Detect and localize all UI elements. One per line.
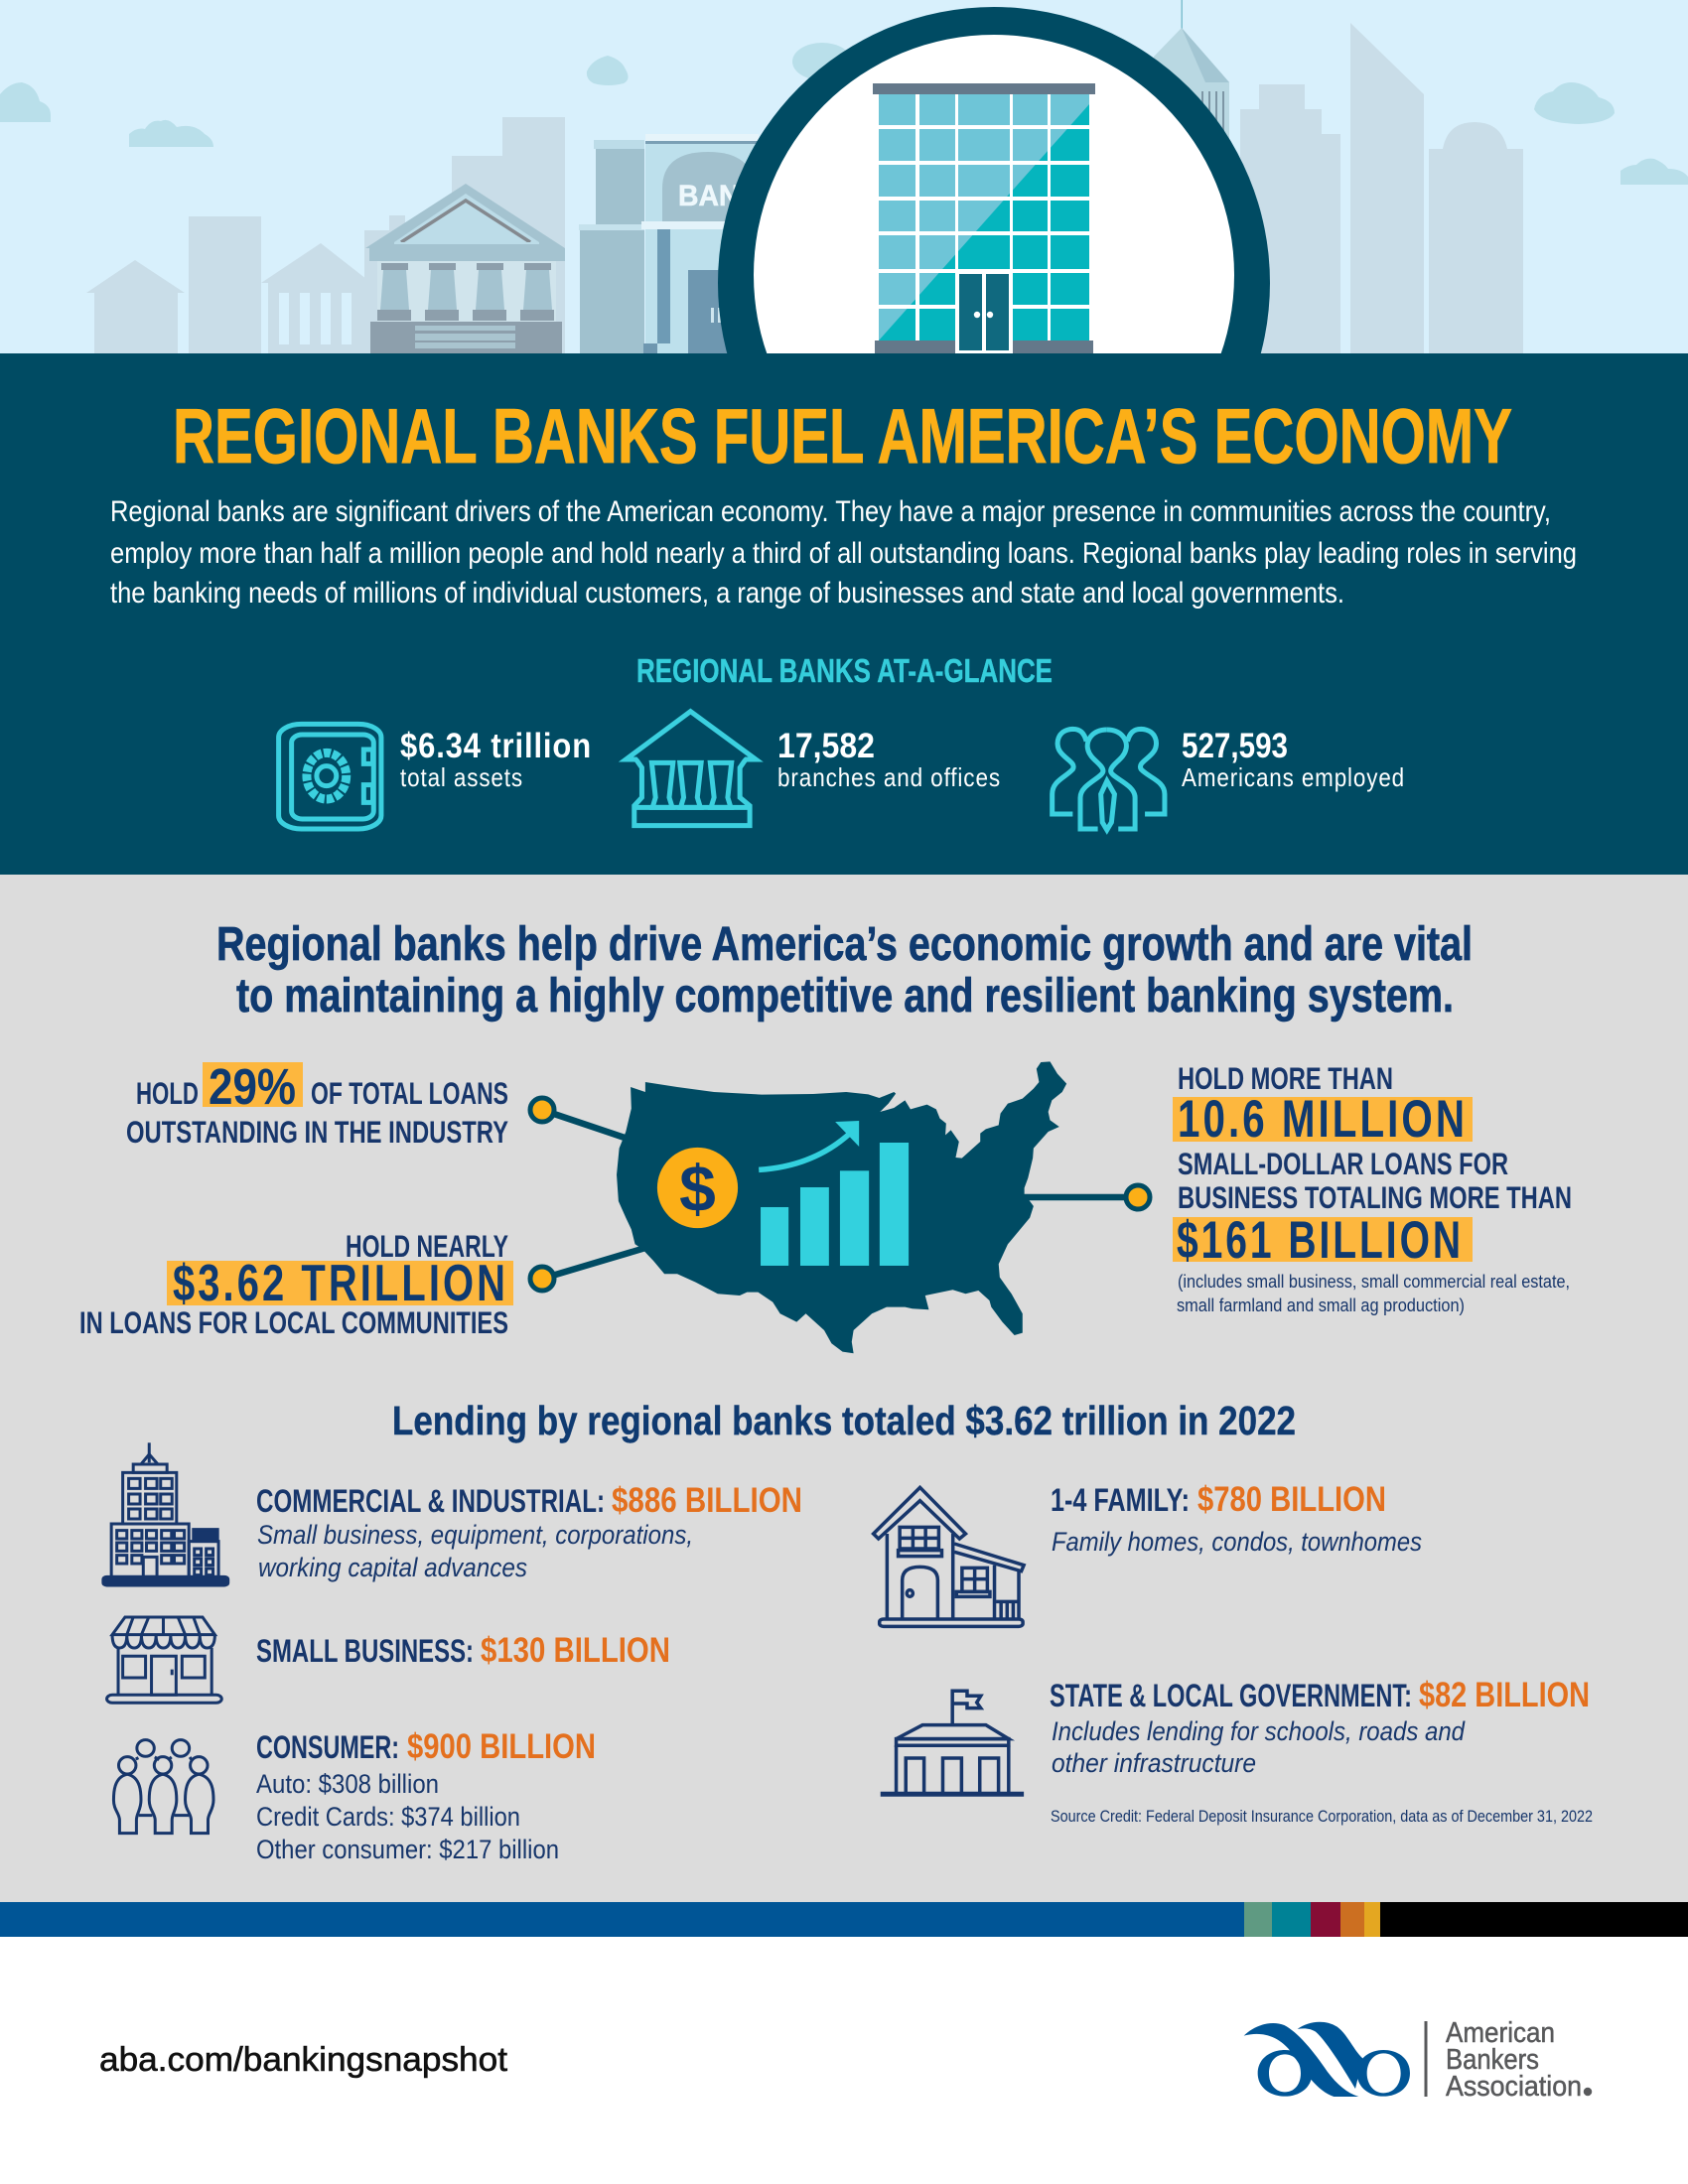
callout: $3.62 trillion: IN LOANS FOR LOCAL COMMUNITIES bbox=[79, 1304, 508, 1340]
logo wordmark: Bankers bbox=[1446, 2044, 1539, 2076]
icon: spire tower bbox=[1154, 0, 1229, 159]
panel: grey content area bbox=[0, 875, 1688, 1902]
text: state and local government: Includes lending for schools, roads and bbox=[1052, 1716, 1466, 1746]
callout: $3.62 trillion bbox=[79, 1228, 513, 1340]
text: small business: $130 BILLION bbox=[481, 1631, 670, 1670]
icon: circular frame bbox=[718, 7, 1270, 559]
BAN sign text: BANK bbox=[678, 180, 760, 212]
intro paragraph: the banking needs of millions of individual customers, a range of businesses and state and local governments. bbox=[110, 577, 1344, 610]
text: 1-4 family bbox=[1051, 1480, 1422, 1557]
icon: glass office building bbox=[873, 83, 1095, 353]
text: state and local government bbox=[1050, 1676, 1590, 1778]
logo wordmark: Association bbox=[1446, 2071, 1582, 2103]
text: state and local government: STATE & LOCAL GOVERNMENT: bbox=[1050, 1678, 1412, 1713]
text: commercial and industrial: Small business, equipment, corporations, bbox=[257, 1520, 693, 1550]
icon: consumers bbox=[113, 1740, 213, 1834]
logo wordmark: American bbox=[1446, 2017, 1555, 2049]
icon: employees bbox=[1053, 729, 1165, 830]
text: commercial and industrial: working capital advances bbox=[258, 1553, 527, 1582]
intro paragraph bbox=[110, 495, 1577, 610]
callout: small-dollar loans bbox=[1173, 1060, 1572, 1270]
connector: small-dollar loans bbox=[1023, 1185, 1150, 1209]
bar chart: rising bars bbox=[759, 1121, 909, 1266]
callout: small-dollar loans: BUSINESS TOTALING MORE THAN bbox=[1178, 1179, 1572, 1215]
arrow: growth bbox=[759, 1121, 859, 1169]
icon: faded background buildings bbox=[86, 23, 1523, 353]
note: small-dollar loan definition bbox=[1177, 1272, 1570, 1315]
heading: at-a-glance: REGIONAL BANKS AT-A-GLANCE bbox=[636, 652, 1053, 689]
text: consumer: CONSUMER: bbox=[256, 1729, 399, 1765]
text: small business: SMALL BUSINESS: bbox=[256, 1633, 474, 1669]
icon: ABA monogram bbox=[1244, 2022, 1410, 2097]
callout: 29% of loans: OF TOTAL LOANS bbox=[311, 1075, 508, 1111]
text: small business bbox=[256, 1631, 670, 1670]
icon: clouds bbox=[0, 43, 1688, 185]
text: state and local government: $82 BILLION bbox=[1419, 1676, 1590, 1714]
text: state and local government: other infrastructure bbox=[1052, 1748, 1256, 1778]
callout: $3.62 trillion: HOLD NEARLY bbox=[346, 1228, 508, 1264]
footer url: aba.com/bankingsnapshot bbox=[99, 2041, 508, 2079]
stat: Americans employed: Americans employed bbox=[1182, 762, 1405, 792]
connector: $3.62 trillion bbox=[530, 1248, 645, 1291]
icon: dollar coin bbox=[657, 1148, 738, 1228]
logo: American Bankers Association bbox=[1244, 2017, 1592, 2103]
map: United States with growth chart bbox=[617, 1061, 1066, 1353]
callout: 29% of loans bbox=[126, 1058, 508, 1150]
icon: storefront bbox=[107, 1617, 221, 1703]
icon: bank building bbox=[626, 712, 756, 826]
panel: dark intro band bbox=[0, 353, 1688, 875]
stat: total assets: $6.34 trillion bbox=[400, 727, 592, 765]
callout: $3.62 trillion: $3.62 TRILLION bbox=[173, 1255, 508, 1312]
note: small-dollar loan definition: (includes small business, small commercial real estate, bbox=[1178, 1272, 1570, 1292]
callout: small-dollar loans: $161 BILLION bbox=[1177, 1211, 1464, 1270]
text: consumer: Auto: $308 billion bbox=[256, 1769, 439, 1799]
heading: lending total: Lending by regional banks totaled $3.62 trillion in 2022 bbox=[392, 1398, 1296, 1443]
heading: economic growth bbox=[216, 918, 1473, 1023]
note: small-dollar loan definition: small farmland and small ag production) bbox=[1177, 1296, 1465, 1315]
stat: branches and offices: branches and offices bbox=[777, 762, 1001, 792]
icon: family house bbox=[874, 1487, 1024, 1626]
callout: 29% of loans: 29% bbox=[209, 1058, 296, 1115]
callout: 29% of loans: OUTSTANDING IN THE INDUSTRY bbox=[126, 1114, 508, 1150]
connector: 29% bbox=[530, 1098, 628, 1139]
footer colour bar bbox=[0, 1902, 1688, 1937]
heading: economic growth: to maintaining a highly competitive and resilient banking system. bbox=[236, 970, 1454, 1023]
icon: office tower bbox=[103, 1442, 228, 1585]
panel: city skyline header bbox=[0, 0, 1688, 559]
callout: small-dollar loans: HOLD MORE THAN bbox=[1178, 1060, 1393, 1096]
text: consumer bbox=[256, 1727, 596, 1864]
stat: total assets: total assets bbox=[400, 762, 523, 792]
logo wordmark bbox=[1446, 2017, 1592, 2103]
text: commercial and industrial: COMMERCIAL & INDUSTRIAL: bbox=[256, 1483, 605, 1519]
icon: safe bbox=[279, 724, 381, 829]
text: consumer: Credit Cards: $374 billion bbox=[256, 1802, 520, 1832]
icon: bank storefront bbox=[579, 134, 760, 353]
text: commercial and industrial: $886 BILLION bbox=[612, 1481, 802, 1520]
callout: small-dollar loans: 10.6 MILLION bbox=[1178, 1090, 1468, 1149]
icon: dollar coin: $ bbox=[679, 1152, 716, 1225]
text: commercial and industrial bbox=[256, 1481, 802, 1582]
text: consumer: $900 BILLION bbox=[407, 1727, 596, 1766]
text: 1-4 family: 1-4 FAMILY: bbox=[1051, 1482, 1190, 1518]
source credit: Source Credit: Federal Deposit Insurance Corporation, data as of December 31, 2022 bbox=[1051, 1807, 1593, 1826]
icon: government building bbox=[881, 1691, 1024, 1794]
stat: branches and offices bbox=[777, 727, 1001, 792]
stat: total assets bbox=[400, 727, 592, 792]
stat: Americans employed: 527,593 bbox=[1182, 727, 1288, 765]
callout: 29% of loans: HOLD bbox=[136, 1075, 199, 1111]
stat: branches and offices: 17,582 bbox=[777, 727, 875, 765]
text: 1-4 family: Family homes, condos, townhomes bbox=[1052, 1527, 1422, 1557]
callout: small-dollar loans: SMALL-DOLLAR LOANS FOR bbox=[1178, 1146, 1508, 1181]
stat: Americans employed bbox=[1182, 727, 1405, 792]
icon: faded temple columns bbox=[279, 293, 352, 344]
text: 1-4 family: $780 BILLION bbox=[1197, 1480, 1386, 1519]
icon: classical bank temple bbox=[365, 184, 565, 353]
text: consumer: Other consumer: $217 billion bbox=[256, 1835, 559, 1864]
